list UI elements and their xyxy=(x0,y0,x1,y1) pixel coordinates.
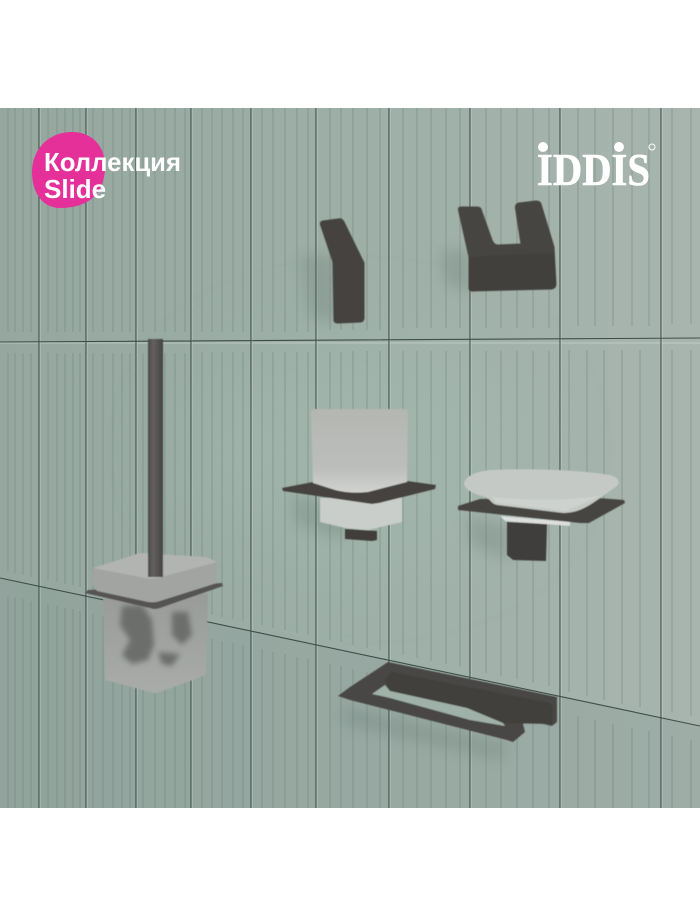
wall bracket xyxy=(507,522,547,561)
badge: collection name xyxy=(32,132,181,208)
handle xyxy=(148,339,163,577)
collection title: Коллекция xyxy=(44,147,181,177)
icon: robe hook, double xyxy=(458,201,556,291)
glass dish xyxy=(464,469,619,513)
product: glass tumbler holder xyxy=(282,409,436,541)
collection title: Slide xyxy=(44,174,106,204)
lower glass xyxy=(320,498,402,530)
shadows cast on the wall xyxy=(290,250,510,760)
wall bracket xyxy=(345,529,377,541)
plate xyxy=(85,583,223,609)
glass body xyxy=(103,593,208,693)
opening of the rail xyxy=(372,685,505,726)
brush silhouette xyxy=(120,605,192,666)
logo: IDDIS: IDDIS xyxy=(537,144,650,195)
glass lid xyxy=(92,553,217,602)
pink blob xyxy=(32,132,105,208)
plate xyxy=(458,498,625,523)
photo background: tiled wall xyxy=(0,108,700,808)
product: soap dish xyxy=(458,469,625,561)
product: towel rail xyxy=(338,662,557,742)
product: toilet brush holder xyxy=(85,339,223,693)
icon: robe hook, single xyxy=(320,219,364,323)
white glass base xyxy=(500,516,570,526)
upper glass xyxy=(311,409,408,493)
plate xyxy=(282,481,436,504)
